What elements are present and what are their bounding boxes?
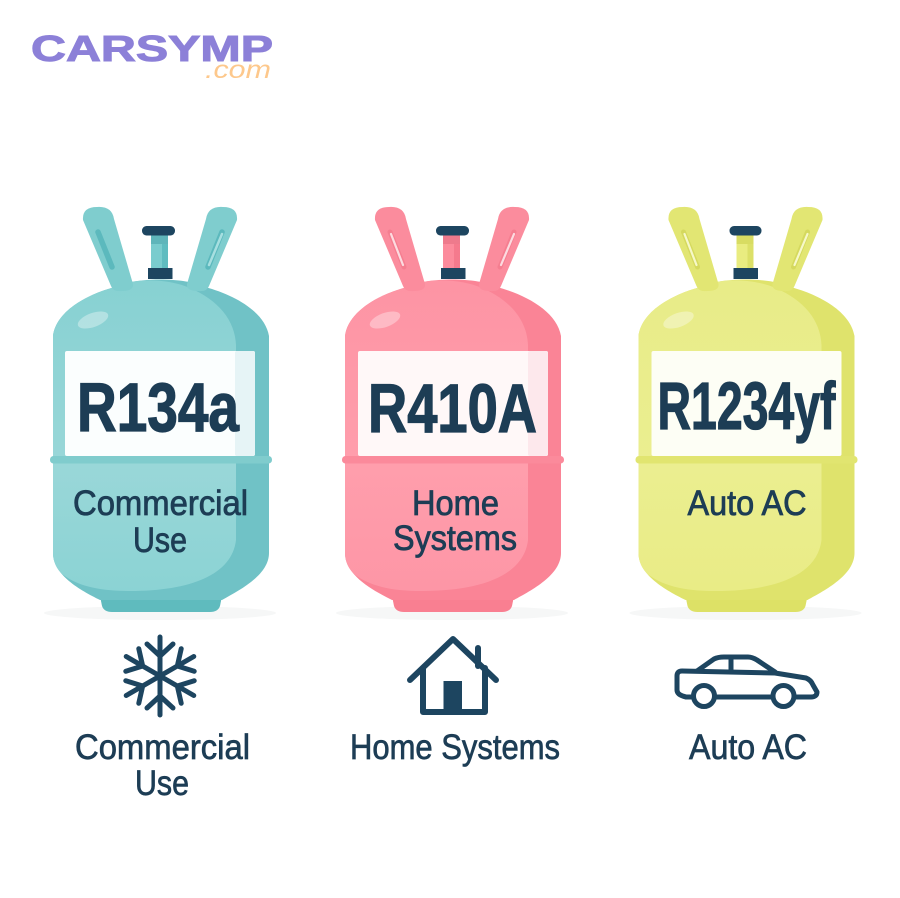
- logo: CARSYMP.com: CARSYMP: [31, 28, 273, 69]
- tank text: Systems: [393, 519, 517, 558]
- icon: house: [410, 639, 496, 712]
- label panel: R134a: [77, 369, 239, 446]
- caption: Commercial Use: [75, 728, 250, 803]
- logo: CARSYMP.com: [31, 28, 273, 84]
- cylinder: R410A: [336, 207, 568, 620]
- icon: snowflake: [120, 637, 200, 715]
- tank text: [73, 484, 248, 560]
- caption: Auto AC: Auto AC: [689, 728, 807, 767]
- cylinder: R134a: [44, 207, 276, 620]
- tank text: [393, 484, 517, 558]
- cylinder: R1234yf: [630, 207, 862, 620]
- logo: CARSYMP.com: .com: [205, 56, 271, 84]
- caption: Commercial Use: Commercial: [75, 728, 250, 767]
- tank text: Commercial: [73, 484, 248, 523]
- tank text: Home: [412, 484, 499, 523]
- label panel: [65, 351, 255, 456]
- tank text: Auto AC: [688, 484, 806, 523]
- label panel: [652, 351, 842, 456]
- label panel: R410A: [368, 370, 537, 447]
- label panel: [358, 351, 548, 456]
- caption: Commercial Use: Use: [135, 764, 189, 803]
- caption: Home Systems: Home Systems: [350, 728, 560, 767]
- tank text: Use: [133, 521, 187, 560]
- icon: car: [677, 657, 817, 706]
